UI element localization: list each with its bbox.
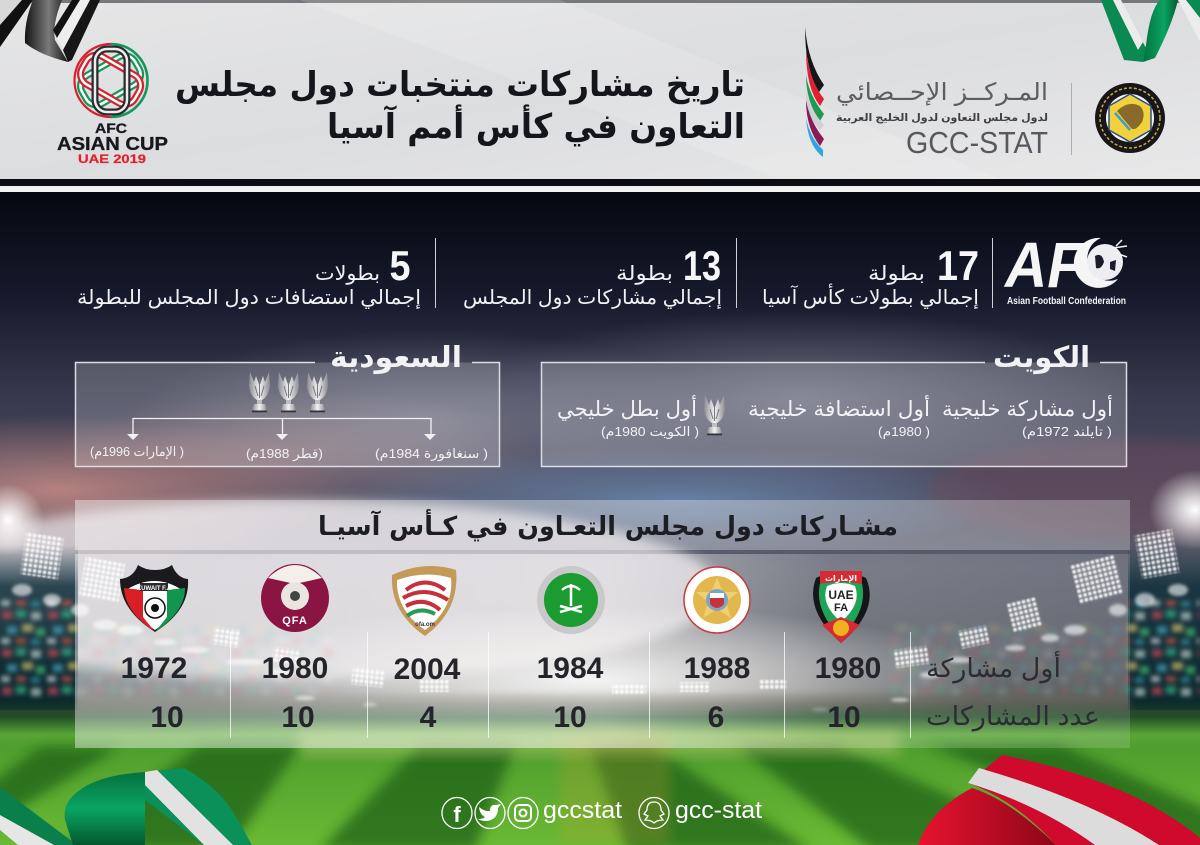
row: number of participations: 6 <box>708 701 724 734</box>
panel: Saudi Arabia <box>76 340 500 466</box>
panel: GCC participations table <box>75 500 1130 748</box>
stand streaks <box>12 584 1188 712</box>
stat: 5 tournaments <box>77 238 436 310</box>
table background <box>75 554 1130 748</box>
icon: Bahrain FA crest <box>684 567 750 633</box>
icon: UAE FA crest: الإمارات <box>825 574 857 583</box>
row: first participation: 1972 <box>121 652 187 685</box>
icon: Qatar FA crest: QFA <box>282 615 308 627</box>
logo: GCC-STAT <box>805 27 1072 160</box>
row: number of participations: عدد المشاركات <box>926 701 1100 731</box>
heading strip <box>75 500 1130 550</box>
text: Qatar 1988: (قطر 1988م) <box>246 446 323 462</box>
stat: 5 tournaments: 5 <box>390 242 410 289</box>
row: number of participations <box>150 701 1100 734</box>
heading: Saudi Arabia: السعودية <box>330 340 462 374</box>
row: number of participations: 4 <box>420 701 437 734</box>
logo: AFC Asian Cup UAE 2019: ASIAN CUP <box>57 133 168 154</box>
text: first Gulf host <box>748 395 930 439</box>
stat: 5 tournaments: إجمالي استضافات دول المجلس للبطولة <box>77 287 421 310</box>
row: first participation: 1984 <box>537 652 604 685</box>
diagram: arrows to the three wins <box>127 418 436 440</box>
ribbon: bottom right red and white <box>918 755 1200 845</box>
row: number of participations: 10 <box>150 701 184 734</box>
icon: trophy <box>704 395 725 435</box>
stadium background <box>0 190 1200 755</box>
icon: snapchat <box>639 798 669 828</box>
logo: GCC-STAT: لدول مجلس التعاون لدول الخليج العربية <box>836 112 1048 124</box>
stat: 17 tournaments <box>762 238 993 310</box>
text: first Gulf champion <box>557 395 699 440</box>
logo: Asian Football Confederation: Asian Football Confederation <box>1007 296 1126 307</box>
title: تاريخ مشاركات منتخبات دول مجلس <box>175 65 745 105</box>
logo: Asian Football Confederation <box>1003 229 1127 307</box>
text: first Gulf champion: ( الكويت 1980م) <box>601 424 699 440</box>
side crowd <box>0 545 78 710</box>
panel: headline statistics <box>77 229 1127 310</box>
logo: AFC Asian Cup UAE 2019: AFC <box>95 120 127 136</box>
header band <box>0 0 1200 192</box>
stat: 13 tournaments: إجمالي مشاركات دول المجلس <box>463 287 722 310</box>
text: gccstat: gccstat <box>543 797 622 824</box>
text: UAE 1996: ( الإمارات 1996م) <box>90 444 184 460</box>
row: first participation: 1980 <box>815 652 881 685</box>
flood lights <box>20 529 1180 694</box>
grass field <box>0 700 1200 845</box>
row: number of participations: 10 <box>827 701 861 734</box>
text: gcc-stat: gcc-stat <box>675 797 762 824</box>
stat: 17 tournaments: بطولة <box>868 263 925 285</box>
title <box>175 65 745 147</box>
icon: UAE FA crest <box>813 571 870 643</box>
logo: GCC-STAT: المـركــز الإحــصائي <box>836 79 1048 106</box>
AFC emblem <box>74 44 148 117</box>
heading strip: مشـاركات دول مجلس التعـاون في كـأس آسيـا <box>318 509 898 542</box>
icon: Oman FA crest: ofa.om <box>415 622 435 628</box>
icon: UAE FA crest: FA <box>834 602 848 614</box>
ribbon: bottom left green and white <box>0 768 252 845</box>
stat: 5 tournaments: بطولات <box>315 263 380 285</box>
logo: GCC emblem <box>1095 83 1165 153</box>
panel: Kuwait <box>542 340 1126 466</box>
text: first Gulf participation: ( تايلند 1972م) <box>1022 424 1112 439</box>
logo: AFC Asian Cup UAE 2019: UAE 2019 <box>78 154 146 166</box>
row: first participation: 1988 <box>684 652 750 685</box>
logo: AFC Asian Cup UAE 2019 <box>57 44 168 166</box>
text: first Gulf host: ( 1980م) <box>878 424 930 439</box>
title: التعاون في كأس أمم آسيا <box>327 104 745 147</box>
icon: Oman FA crest <box>392 566 456 636</box>
row: number of participations: 10 <box>553 701 587 734</box>
icon: three trophies <box>249 372 328 412</box>
stat: 13 tournaments <box>463 238 737 310</box>
icon: Kuwait FA crest <box>120 565 188 632</box>
icon: twitter <box>475 798 505 828</box>
text: first Gulf participation: أول مشاركة خليجية <box>942 395 1113 421</box>
icon: Qatar FA crest <box>261 564 329 632</box>
stat: 13 tournaments: بطولة <box>616 263 673 285</box>
row: first participation: أول مشاركة <box>926 650 1061 684</box>
social media handles <box>442 797 762 828</box>
logo: Asian Football Confederation: AF <box>1003 229 1085 301</box>
icon: Saudi FF crest <box>537 566 605 634</box>
text: first Gulf participation <box>942 395 1113 439</box>
icon: coloured feather <box>805 27 824 157</box>
row: number of participations: 10 <box>281 701 315 734</box>
icon: facebook: f <box>453 802 461 827</box>
row: first participation: 2004 <box>394 653 461 686</box>
row: first participation <box>121 650 1061 686</box>
stat: 17 tournaments: 17 <box>937 242 979 289</box>
text: first Gulf champion: أول بطل خليجي <box>557 395 697 421</box>
ribbon: top left black and white <box>0 0 100 62</box>
text: first Gulf host: أول استضافة خليجية <box>748 395 930 421</box>
icon: instagram <box>508 798 538 828</box>
icon: UAE FA crest: UAE <box>828 588 854 602</box>
heading: Kuwait: الكويت <box>993 340 1090 374</box>
stat: 13 tournaments: 13 <box>683 242 721 289</box>
row: first participation: 1980 <box>262 652 328 685</box>
ribbon: top right green and white <box>1101 0 1200 62</box>
icon: facebook <box>442 798 472 828</box>
stat: 17 tournaments: إجمالي بطولات كأس آسيا <box>762 283 979 310</box>
text: Singapore 1984: ( سنغافورة 1984م) <box>375 446 488 462</box>
logo: GCC-STAT: GCC-STAT <box>906 125 1048 160</box>
icon: Kuwait FA crest: KUWAIT F.A <box>137 586 172 592</box>
